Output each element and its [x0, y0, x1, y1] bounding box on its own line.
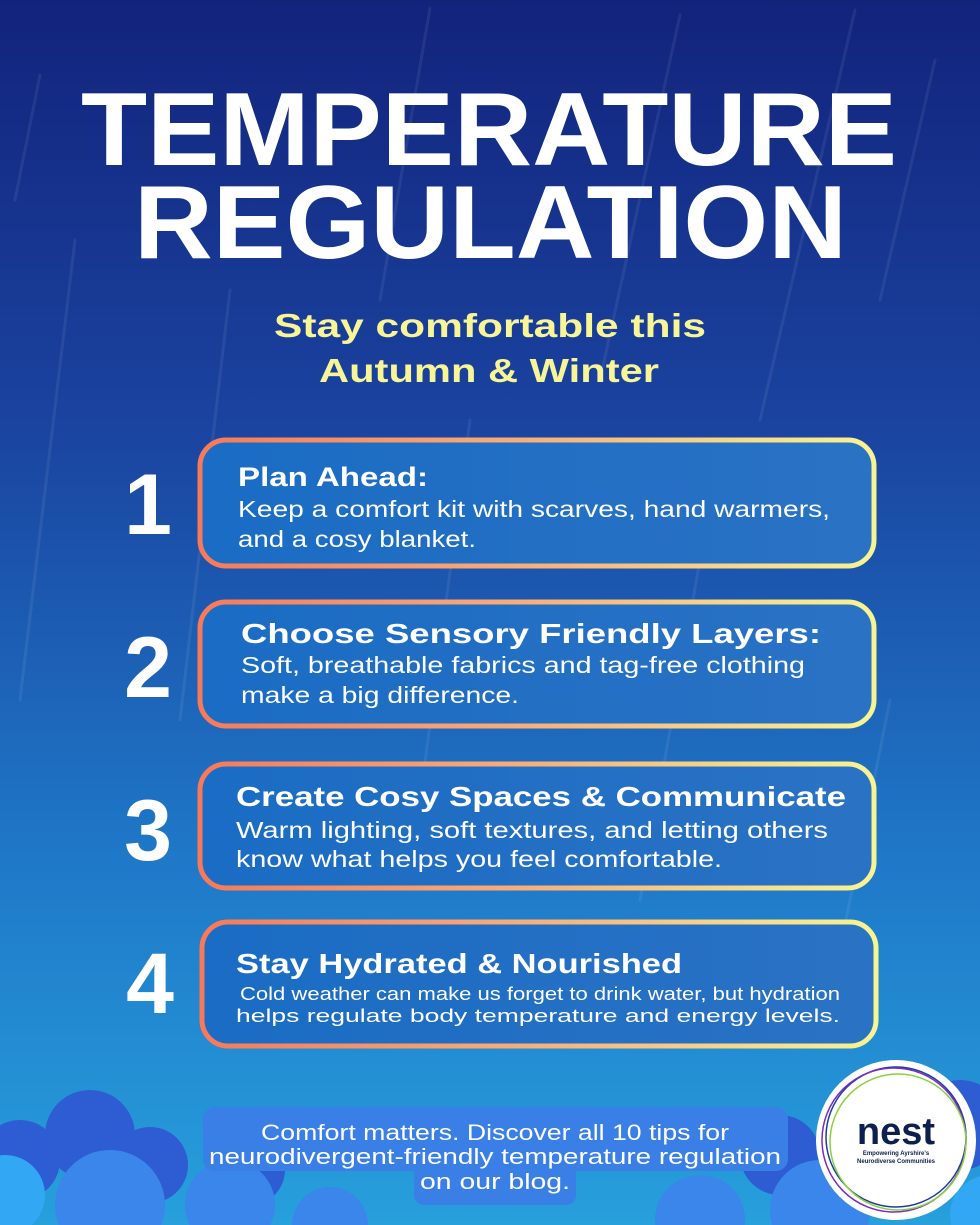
title: REGULATION: [134, 165, 847, 281]
tip 1: [124, 440, 874, 566]
tip 2: Soft, breathable fabrics and tag-free clothing: [241, 652, 805, 678]
tip 3: Warm lighting, soft textures, and letting others: [236, 817, 828, 843]
logo: nest: [816, 1060, 976, 1220]
clouds: [0, 1080, 980, 1225]
tip 3: Create Cosy Spaces & Communicate: [236, 781, 846, 812]
tip 3: know what helps you feel comfortable.: [236, 846, 722, 872]
tip 2: Choose Sensory Friendly Layers:: [241, 618, 821, 649]
footer callout: [203, 1107, 788, 1205]
tip 4: [126, 922, 876, 1046]
tip 4: helps regulate body temperature and energy levels.: [236, 1006, 840, 1026]
subtitle: [274, 307, 706, 389]
logo: nest: Empowering Ayrshire's: [863, 1151, 930, 1157]
tip 3: [124, 764, 874, 888]
tip 1: Keep a comfort kit with scarves, hand warmers,: [238, 496, 830, 522]
tip 1: Plan Ahead:: [238, 462, 428, 492]
footer callout: Comfort matters. Discover all 10 tips for: [261, 1120, 729, 1145]
tip 2: [124, 602, 874, 726]
tip 2: make a big difference.: [241, 682, 519, 708]
subtitle: Stay comfortable this: [274, 307, 706, 344]
tip 4: Stay Hydrated & Nourished: [236, 948, 682, 979]
subtitle: Autumn & Winter: [319, 352, 659, 389]
title: TEMPERATURE: [81, 72, 897, 188]
logo: nest: nest: [857, 1111, 935, 1153]
tip 3: 3: [124, 783, 172, 879]
tip 4: Cold weather can make us forget to drink water, but hydration: [240, 984, 840, 1004]
footer callout: on our blog.: [420, 1169, 570, 1194]
footer callout: neurodivergent-friendly temperature regulation: [209, 1144, 781, 1169]
logo: nest: Neurodiverse Communities: [857, 1159, 936, 1165]
title: [81, 72, 897, 281]
tip 1: and a cosy blanket.: [238, 526, 476, 552]
tip 1: 1: [124, 457, 172, 553]
tip 4: 4: [126, 936, 174, 1032]
tip 2: 2: [124, 620, 172, 716]
